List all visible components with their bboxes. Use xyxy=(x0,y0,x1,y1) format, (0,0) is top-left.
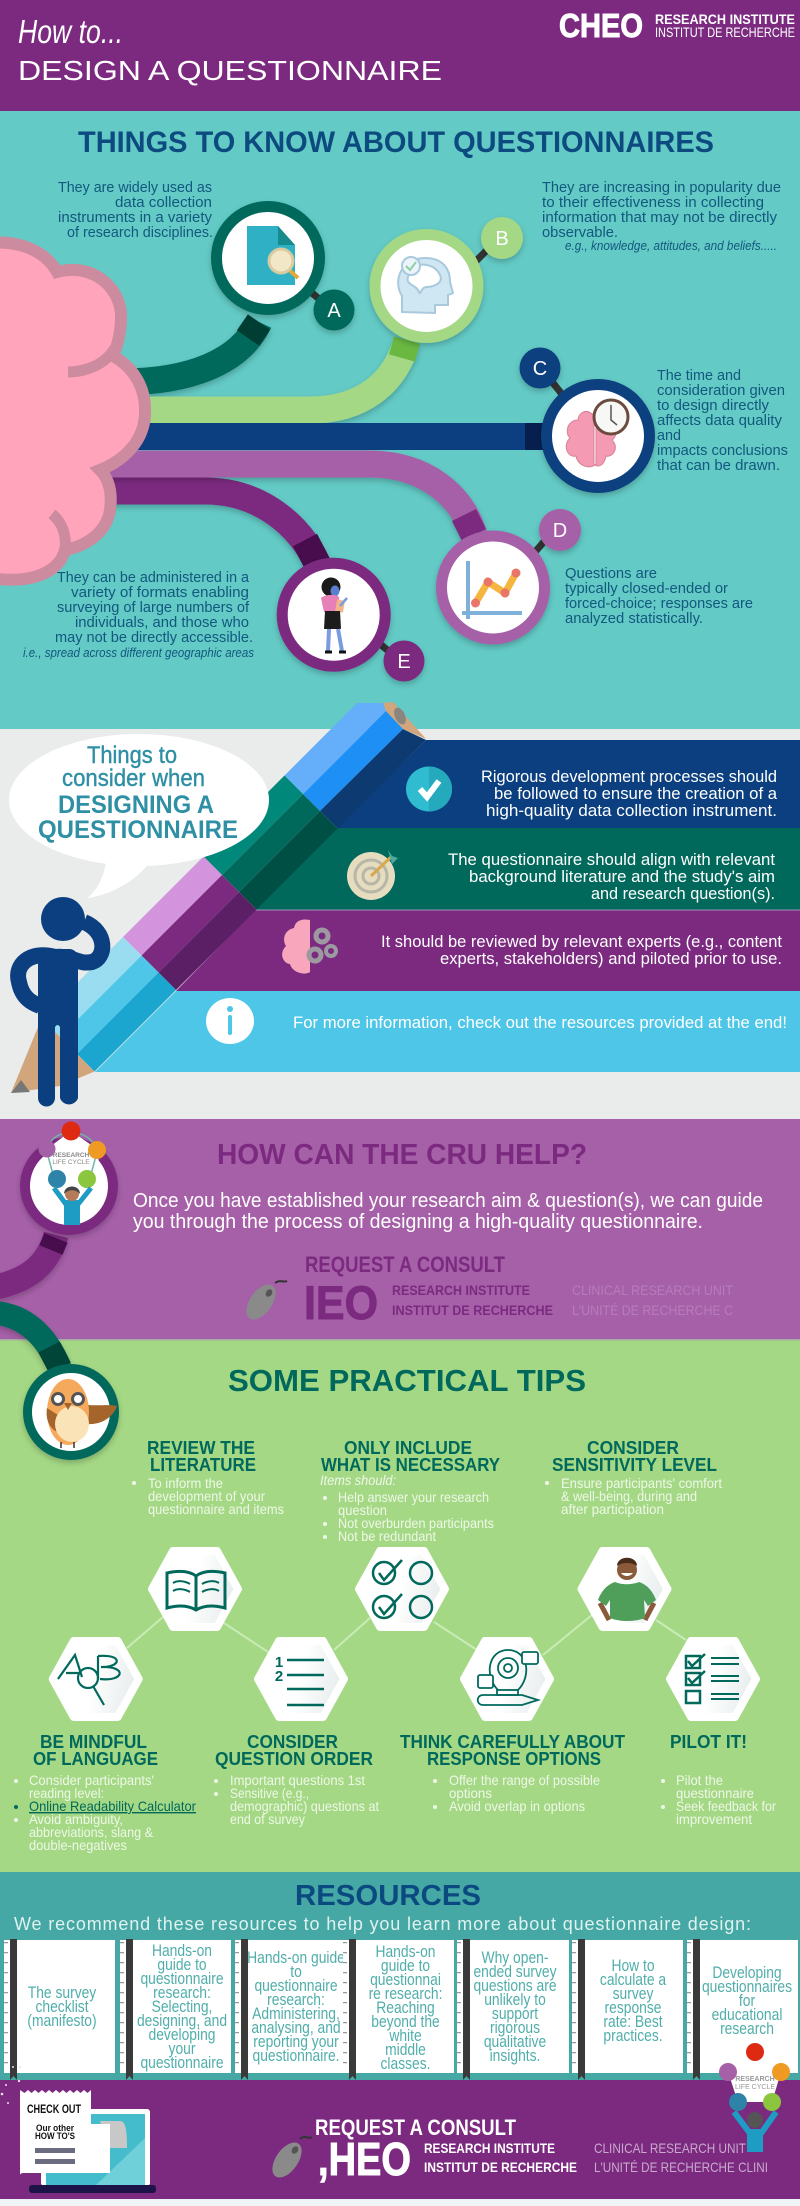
icon: document with magnifier xyxy=(247,226,298,285)
tip: be mindful of language: OF LANGUAGE xyxy=(33,1749,158,1769)
tip: only include what is necessary: question xyxy=(338,1502,387,1518)
tip: only include what is necessary: WHAT IS NECESSARY xyxy=(321,1455,500,1475)
panel: how can the CRU help xyxy=(0,1122,763,1329)
icon: woman with clipboard xyxy=(321,578,347,652)
tip: be mindful of language: Online Readability Calculator xyxy=(29,1798,196,1814)
text: reviewed: It should be reviewed by relevant experts (e.g., content xyxy=(381,932,782,951)
tip: think carefully about response options xyxy=(400,1732,625,1814)
resource card 1 xyxy=(4,1939,115,2080)
tip: consider question order: CONSIDER xyxy=(247,1732,338,1752)
resource card 1: (manifesto) xyxy=(27,2012,97,2030)
tip: be mindful of language xyxy=(14,1732,196,1853)
panel: practical tips xyxy=(0,1313,800,1853)
tip: only include what is necessary: Not be redundant xyxy=(338,1528,436,1544)
text: we recommend: We recommend these resources to help you learn more about questionnaire design: xyxy=(14,1914,751,1934)
request a consult: REQUEST A CONSULT xyxy=(305,1252,505,1277)
text B: information that may not be directly xyxy=(542,209,777,226)
text: more information: For more information, check out the resources provided at the end! xyxy=(293,1013,787,1032)
text B: e.g., knowledge, attitudes, and beliefs..... xyxy=(565,238,777,253)
icon: laptop with note: Our other xyxy=(36,2123,74,2133)
heading: how can the CRU help: HOW CAN THE CRU HELP? xyxy=(217,1139,587,1171)
resource card 4: Hands-on xyxy=(375,1943,436,1961)
connector lines xyxy=(127,1615,686,1655)
resource card 2: questionnaire xyxy=(140,2054,224,2072)
node A xyxy=(216,206,354,330)
request a consult: CLINICAL RESEARCH UNIT xyxy=(594,2140,746,2156)
node C xyxy=(520,348,650,488)
resource card 4 xyxy=(343,1939,454,2080)
resource card 5: rigorous xyxy=(490,2019,540,2037)
text C: The time and xyxy=(657,367,741,384)
resource card 7: questionnaires xyxy=(702,1978,792,1996)
bubble text xyxy=(38,742,238,844)
tip: consider question order: demographic) questions at xyxy=(230,1798,379,1814)
band: more information xyxy=(95,991,800,1072)
arm A xyxy=(120,322,259,382)
icon: research life cycle figure: LIFE CYCLE xyxy=(735,2084,775,2091)
node D xyxy=(442,509,581,639)
bubble text: Things to xyxy=(87,742,177,769)
hexagon: question order: 2 xyxy=(275,1668,283,1685)
resource card 4: guide to xyxy=(381,1957,430,1975)
hexagon: response options bulb xyxy=(464,1641,550,1717)
text E xyxy=(23,569,254,660)
text E: They can be administered in a xyxy=(57,569,250,586)
tip: consider sensitivity level xyxy=(545,1438,722,1517)
icon: laptop with note: CHECK OUT xyxy=(27,2102,81,2116)
title: design a questionnaire: DESIGN A QUESTIONNAIRE xyxy=(18,55,442,86)
badge E: E xyxy=(397,651,411,673)
tip: pilot it: Seek feedback for xyxy=(676,1798,776,1814)
bubble text: DESIGNING A xyxy=(58,791,214,819)
resource card 4: re research: xyxy=(369,1985,442,2003)
node E xyxy=(282,563,424,682)
heading: resources: RESOURCES xyxy=(295,1880,481,1912)
circle: research life cycle: RESEARCH xyxy=(53,1152,90,1159)
text B: to their effectiveness in collecting xyxy=(542,194,764,211)
panel: things to know xyxy=(0,126,788,682)
hexagon: AOB xyxy=(53,1641,139,1717)
circle: owl xyxy=(28,1368,117,1456)
text A: They are widely used as xyxy=(58,179,212,196)
icon: brain with clock xyxy=(566,400,628,467)
text E: may not be directly accessible. xyxy=(55,629,253,646)
text: guide: Once you have established your research aim & question(s), we can guide xyxy=(133,1190,763,1212)
tip: be mindful of language: abbreviations, slang & xyxy=(29,1824,154,1840)
resource card 6 xyxy=(572,1939,683,2080)
resource card 7: for xyxy=(739,1992,755,2010)
resource card 3: questionnaire. xyxy=(253,2047,339,2065)
resource card 3 xyxy=(235,1939,346,2080)
resource card 5: Why open- xyxy=(482,1949,548,1967)
tip: pilot it: improvement xyxy=(676,1811,752,1827)
resource card 2 xyxy=(120,1939,231,2080)
tip: consider sensitivity level: SENSITIVITY LEVEL xyxy=(552,1455,717,1475)
text C: consideration given xyxy=(657,382,785,399)
tip: consider question order: QUESTION ORDER xyxy=(215,1749,373,1769)
node B xyxy=(375,217,523,338)
hexagon: book xyxy=(152,1551,238,1627)
text: rigorous development: be followed to ensure the creation of a xyxy=(494,784,778,803)
resource card 6: response xyxy=(605,1999,661,2017)
tip: only include what is necessary: Help answer your research xyxy=(338,1489,489,1505)
icon: check badge xyxy=(406,766,452,812)
icon: target xyxy=(347,850,398,900)
heading: some practical tips: SOME PRACTICAL TIPS xyxy=(228,1363,586,1398)
resource card 5: unlikely to xyxy=(484,1991,546,2009)
resource card 5 xyxy=(457,1939,569,2080)
text C: and xyxy=(657,427,681,444)
resource card 5: questions are xyxy=(473,1977,557,1995)
tip: think carefully about response options: THINK CAREFULLY ABOUT xyxy=(400,1732,625,1752)
text D xyxy=(565,565,753,627)
badge A: A xyxy=(327,300,341,322)
resource card 3: research: xyxy=(267,1991,325,2009)
band: rigorous development xyxy=(337,740,800,828)
icon: laptop with note xyxy=(20,2090,156,2193)
logo: CHEO research institute xyxy=(559,7,795,44)
text C xyxy=(657,367,788,474)
thinking person xyxy=(18,897,102,1106)
resource card 2: Selecting, xyxy=(152,1998,212,2016)
resource card 6: practices. xyxy=(603,2027,663,2045)
tip: be mindful of language: double-negatives xyxy=(29,1837,127,1853)
tip: think carefully about response options: options xyxy=(449,1785,492,1801)
arm B xyxy=(120,340,407,410)
bubble text: consider when xyxy=(62,765,205,792)
resource card 4: middle xyxy=(385,2041,426,2059)
speech bubble xyxy=(9,734,269,898)
request a consult: INSTITUT DE RECHERCHE xyxy=(392,1303,553,1318)
text D: analyzed statistically. xyxy=(565,610,703,627)
heading: things to know: THINGS TO KNOW ABOUT QUESTIONNAIRES xyxy=(78,126,714,159)
arm E xyxy=(100,491,318,565)
tip: review the literature: questionnaire and items xyxy=(148,1501,284,1517)
arm C xyxy=(120,423,550,450)
resource card 7: educational xyxy=(712,2006,782,2024)
text: rigorous development: Rigorous development processes should xyxy=(481,767,777,786)
panel: resources xyxy=(4,1880,798,2080)
request a consult: CLINICAL RESEARCH UNIT xyxy=(572,1283,733,1298)
resource card 3: to xyxy=(290,1963,302,1981)
sparkles xyxy=(1,2066,21,2104)
badge B xyxy=(481,217,523,259)
tip: pilot it: questionnaire xyxy=(676,1785,754,1801)
text E: individuals, and those who xyxy=(75,614,249,631)
resource card 1: checklist xyxy=(35,1998,89,2016)
tip: be mindful of language: Avoid ambiguity, xyxy=(29,1811,123,1827)
tip: review the literature: To inform the xyxy=(148,1475,223,1491)
tip: be mindful of language: BE MINDFUL xyxy=(40,1732,147,1752)
resource card 3: questionnaire xyxy=(254,1977,338,1995)
header xyxy=(18,7,795,86)
text: align: and research question(s). xyxy=(591,884,775,903)
icon: brain and gears xyxy=(282,919,336,974)
text D: typically closed-ended or xyxy=(565,580,728,597)
icon: mouse xyxy=(241,1279,287,1325)
tip: only include what is necessary: Items should: xyxy=(320,1472,396,1488)
resource card 5: qualitative xyxy=(484,2033,546,2051)
text E: variety of formats enabling xyxy=(71,584,249,601)
tip: review the literature: LITERATURE xyxy=(150,1455,256,1475)
logo: CHEO research institute: CHEO xyxy=(559,7,643,44)
tip: consider sensitivity level: & well-being, during and xyxy=(561,1488,697,1504)
brain illustration xyxy=(0,242,145,580)
text: align xyxy=(448,850,775,903)
text A: of research disciplines. xyxy=(67,224,213,241)
tip: only include what is necessary: Not overburden participants xyxy=(338,1515,494,1531)
resource card 7: research xyxy=(720,2020,774,2038)
resource card 5: ended survey xyxy=(473,1963,557,1981)
text A xyxy=(58,179,213,241)
hexagon: checklist xyxy=(670,1641,756,1717)
resource card 6: How to xyxy=(611,1957,655,1975)
text: align: background literature and the study's aim xyxy=(469,867,775,886)
resource card 2: research: xyxy=(153,1984,211,2002)
logo fragment: IEO xyxy=(304,1276,378,1329)
resource card 7: Developing xyxy=(712,1964,782,1982)
resource card 4: beyond the xyxy=(371,2013,440,2031)
text C: affects data quality xyxy=(657,412,782,429)
resource card 5: insights. xyxy=(490,2047,540,2065)
text: rigorous development xyxy=(481,767,778,820)
circle: research life cycle xyxy=(25,1122,113,1230)
text D: Questions are xyxy=(565,565,657,582)
resource card 2: your xyxy=(169,2040,195,2058)
arm to CRU circle xyxy=(0,1235,56,1287)
text E: surveying of large numbers of xyxy=(57,599,250,616)
resource card 3: analysing, and xyxy=(251,2019,341,2037)
tip: think carefully about response options: RESPONSE OPTIONS xyxy=(427,1749,601,1769)
tip: review the literature: REVIEW THE xyxy=(147,1438,255,1458)
request a consult: L'UNITÉ DE RECHERCHE C xyxy=(572,1303,733,1318)
request a consult: REQUEST A CONSULT xyxy=(315,2115,516,2140)
hexagon: options xyxy=(359,1551,445,1627)
resource card 4: questionnai xyxy=(370,1971,441,1989)
band: reviewed by experts xyxy=(176,910,800,991)
tip: think carefully about response options: Offer the range of possible xyxy=(449,1772,600,1788)
arm to owl circle xyxy=(0,1313,60,1368)
icon: line chart xyxy=(462,561,522,619)
hexagon: question order xyxy=(258,1641,344,1717)
text A: data collection xyxy=(115,194,212,211)
request a consult: INSTITUT DE RECHERCHE xyxy=(424,2159,577,2175)
icon: info xyxy=(206,998,254,1044)
tip: consider sensitivity level: after participation xyxy=(561,1501,664,1517)
resource card 7 xyxy=(687,1939,798,2080)
text: align: The questionnaire should align with relevant xyxy=(448,850,775,869)
resource card 2: designing, and xyxy=(137,2012,227,2030)
text B xyxy=(542,179,781,253)
text: reviewed xyxy=(381,932,782,968)
resource card 4: Reaching xyxy=(376,1999,435,2017)
text D: forced-choice; responses are xyxy=(565,595,753,612)
tip: be mindful of language: reading level: xyxy=(29,1785,104,1801)
icon: research life cycle figure xyxy=(719,2043,790,2152)
resource card 4: classes. xyxy=(380,2055,431,2073)
resource card 6: survey xyxy=(613,1985,654,2003)
text C: that can be drawn. xyxy=(657,457,780,474)
request a consult xyxy=(241,1252,733,1329)
request a consult: L'UNITÉ DE RECHERCHE CLINI xyxy=(594,2159,768,2175)
badge C: C xyxy=(533,358,547,380)
tip: review the literature: development of your xyxy=(148,1488,265,1504)
badge B: B xyxy=(495,228,509,250)
text C: to design directly xyxy=(657,397,769,414)
resource card 1: The survey xyxy=(28,1984,97,2002)
tip: consider question order: Important questions 1st xyxy=(230,1772,365,1788)
text B: observable. xyxy=(542,224,618,241)
text E: i.e., spread across different geographic areas xyxy=(23,645,254,660)
text B: They are increasing in popularity due xyxy=(542,179,781,196)
icon: laptop with note: HOW TO'S xyxy=(35,2131,75,2141)
resource card 6: rate: Best xyxy=(603,2013,663,2031)
text C: impacts conclusions xyxy=(657,442,788,459)
request a consult: RESEARCH INSTITUTE xyxy=(424,2140,555,2156)
hexagon: question order: 1 xyxy=(275,1654,283,1671)
title: how to: How to... xyxy=(18,13,123,50)
tip: consider question order xyxy=(214,1732,379,1827)
tip: pilot it: PILOT IT! xyxy=(670,1732,747,1752)
icon: research life cycle figure: RESEARCH xyxy=(735,2076,775,2083)
text A: instruments in a variety xyxy=(58,209,212,226)
panel: things to consider xyxy=(9,702,800,1106)
tip: pilot it xyxy=(661,1732,776,1827)
tip: consider sensitivity level: Ensure participants' comfort xyxy=(561,1475,722,1491)
resource card 6: calculate a xyxy=(600,1971,667,1989)
resource card 3: reporting your xyxy=(253,2033,339,2051)
arm D xyxy=(105,464,474,535)
icon: head with check xyxy=(398,257,453,313)
bubble text: QUESTIONNAIRE xyxy=(38,816,238,844)
tip: only include what is necessary: ONLY INCLUDE xyxy=(344,1438,472,1458)
request a consult xyxy=(267,2115,768,2185)
tip: consider sensitivity level: CONSIDER xyxy=(587,1438,679,1458)
resource card 4: white xyxy=(388,2027,422,2045)
text: guide xyxy=(133,1190,763,1233)
badge E xyxy=(384,640,424,682)
circle: research life cycle: LIFE CYCLE xyxy=(52,1159,90,1166)
request a consult: RESEARCH INSTITUTE xyxy=(392,1283,530,1298)
text: reviewed: experts, stakeholders) and piloted prior to use. xyxy=(440,949,782,968)
panel: footer xyxy=(1,2043,790,2193)
logo fragment: ,HEO xyxy=(318,2133,411,2185)
tip: pilot it: Pilot the xyxy=(676,1772,723,1788)
tip: consider question order: end of survey xyxy=(230,1811,305,1827)
text: rigorous development: high-quality data collection instrument. xyxy=(486,801,777,820)
hexagon: man xyxy=(582,1551,668,1627)
icon: mouse xyxy=(267,2137,312,2183)
tip: think carefully about response options: Avoid overlap in options xyxy=(449,1798,585,1814)
band: align with literature xyxy=(255,828,800,910)
pencil illustration xyxy=(11,702,426,1093)
resource card 3: Administering, xyxy=(252,2005,340,2023)
resource card 2: developing xyxy=(149,2026,215,2044)
tip: only include what is necessary xyxy=(320,1438,500,1544)
text: guide: you through the process of designing a high-quality questionnaire. xyxy=(133,1211,703,1233)
tip: review the literature xyxy=(132,1438,284,1517)
resource card 2: Hands-on xyxy=(152,1942,212,1960)
resource card 2: questionnaire xyxy=(140,1970,224,1988)
resource card 3: Hands-on guide xyxy=(247,1949,345,1967)
tip: be mindful of language: Consider participants' xyxy=(29,1772,154,1788)
tip: consider question order: Sensitive (e.g., xyxy=(230,1785,309,1801)
resource card 5: support xyxy=(492,2005,539,2023)
badge D: D xyxy=(553,520,567,542)
resource card 2: guide to xyxy=(157,1956,207,1974)
